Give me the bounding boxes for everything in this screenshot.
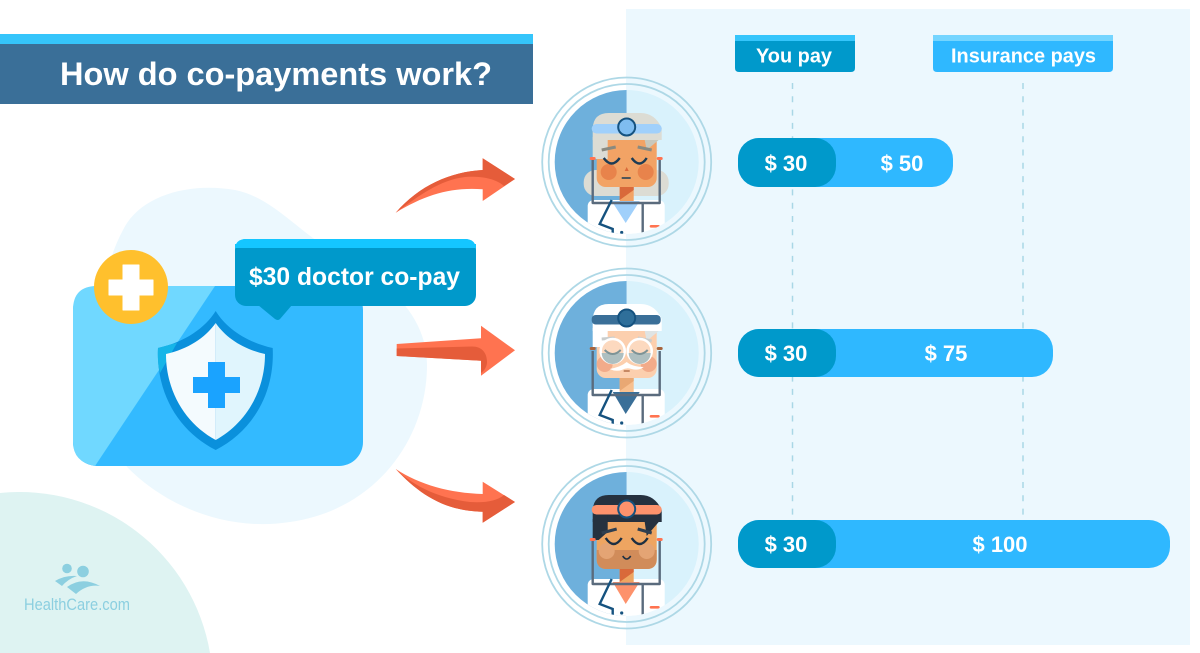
column header: You pay (735, 35, 855, 72)
arrow: to middle doctor (397, 326, 515, 376)
portrait rings (542, 78, 711, 246)
column header: Insurance pays (933, 35, 1113, 72)
portrait rings (542, 460, 711, 628)
icon: shield (158, 311, 273, 450)
logo wordmark: HealthCare.com (24, 596, 130, 614)
figure (584, 113, 669, 240)
callout text: $30 doctor co-pay (249, 263, 460, 291)
insurance card (73, 250, 363, 466)
you pay amount: $ 30 (765, 532, 807, 557)
arrow: to top doctor (396, 158, 515, 213)
title banner (0, 34, 533, 104)
panel: right comparison background (626, 9, 1190, 645)
figure (588, 304, 665, 431)
portrait background (555, 90, 699, 234)
logo: HealthCare.com (24, 564, 130, 614)
bar: $30 + $50 (738, 138, 953, 187)
title text: How do co-payments work? (60, 56, 492, 92)
you pay segment (738, 138, 836, 187)
header text: You pay (756, 46, 833, 68)
portrait background (555, 281, 699, 425)
arrow: to bottom doctor (396, 469, 515, 523)
you pay segment (738, 329, 836, 377)
background blob behind card (99, 188, 427, 524)
insurance amount: $ 100 (972, 532, 1028, 557)
portrait rings (542, 268, 711, 438)
bar: $30 + $75 (738, 329, 1053, 377)
portrait background (555, 472, 699, 616)
you pay segment (738, 520, 836, 568)
you pay amount: $ 30 (765, 341, 807, 366)
insurance amount: $ 50 (881, 151, 923, 176)
icon: yellow plus badge (94, 250, 168, 324)
callout: doctor co-pay (235, 239, 476, 320)
doctor 3: dark-haired doctor (542, 460, 711, 628)
header text: Insurance pays (951, 46, 1096, 68)
figure (588, 495, 665, 622)
doctor 1: grey-haired woman (542, 78, 711, 246)
logo background quarter circle (0, 492, 210, 653)
card light corner (73, 286, 215, 466)
insurance amount: $ 75 (925, 341, 967, 366)
bar: $30 + $100 (738, 520, 1170, 568)
logo icon: two people (55, 564, 100, 594)
you pay amount: $ 30 (765, 151, 807, 176)
doctor 2: white-haired man with glasses (542, 268, 711, 438)
